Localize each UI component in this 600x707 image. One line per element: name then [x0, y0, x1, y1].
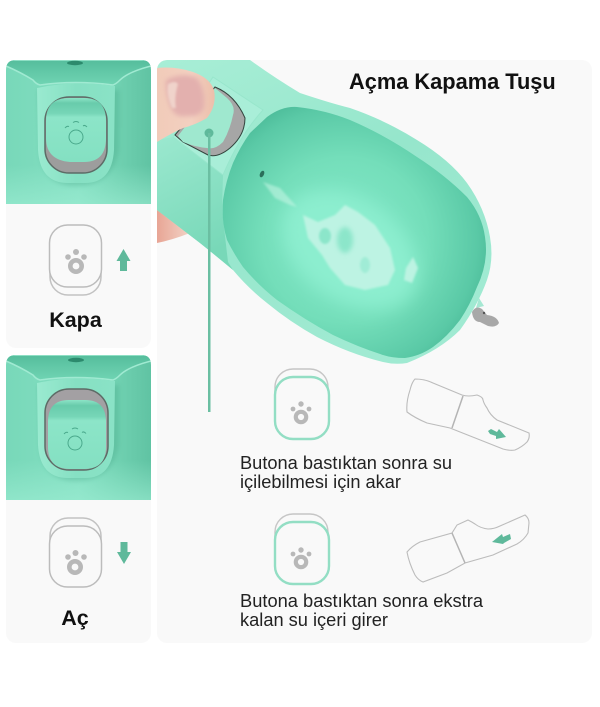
button recess [175, 87, 245, 156]
label: Aç: Aç [61, 606, 89, 630]
scoop body [157, 60, 491, 364]
paw emboss [64, 428, 86, 450]
text: first description: Butona bastıktan sonra su [240, 452, 452, 473]
icon: button open state [275, 369, 329, 439]
paw emboss [65, 122, 87, 144]
water bowl [222, 107, 486, 358]
button platform [173, 77, 263, 175]
icon: bottle outline with right arrow [407, 379, 529, 450]
text: first description line 2: içilebilmesi için akar [240, 471, 401, 492]
handle underside [157, 137, 233, 270]
strap knot [472, 298, 499, 327]
thumb [157, 68, 215, 142]
panel: Aç (open) [6, 355, 151, 643]
panel: Kapa (close) [6, 60, 151, 348]
icon: bottle outline with left arrow [407, 515, 529, 582]
text: second description: Butona bastıktan sonra ekstra [240, 590, 484, 611]
icon: button closed state [275, 514, 329, 584]
icon: button outline with paw [50, 225, 102, 295]
icon: arrow up [116, 249, 130, 271]
label: Kapa: Kapa [49, 308, 103, 332]
icon: button outline with paw [50, 518, 102, 587]
photo: button in closed position [6, 60, 151, 204]
water reflection [263, 182, 418, 290]
photo: bottle scoop held by hand [157, 60, 499, 364]
icon: arrow down [117, 542, 131, 564]
lower finger [157, 210, 190, 243]
text: second description line 2: kalan su içeri girer [240, 609, 388, 630]
panel: main [157, 60, 554, 630]
pointer line [204, 128, 214, 412]
heading: Açma Kapama Tuşu [349, 69, 556, 94]
photo: button in open position [6, 355, 151, 500]
